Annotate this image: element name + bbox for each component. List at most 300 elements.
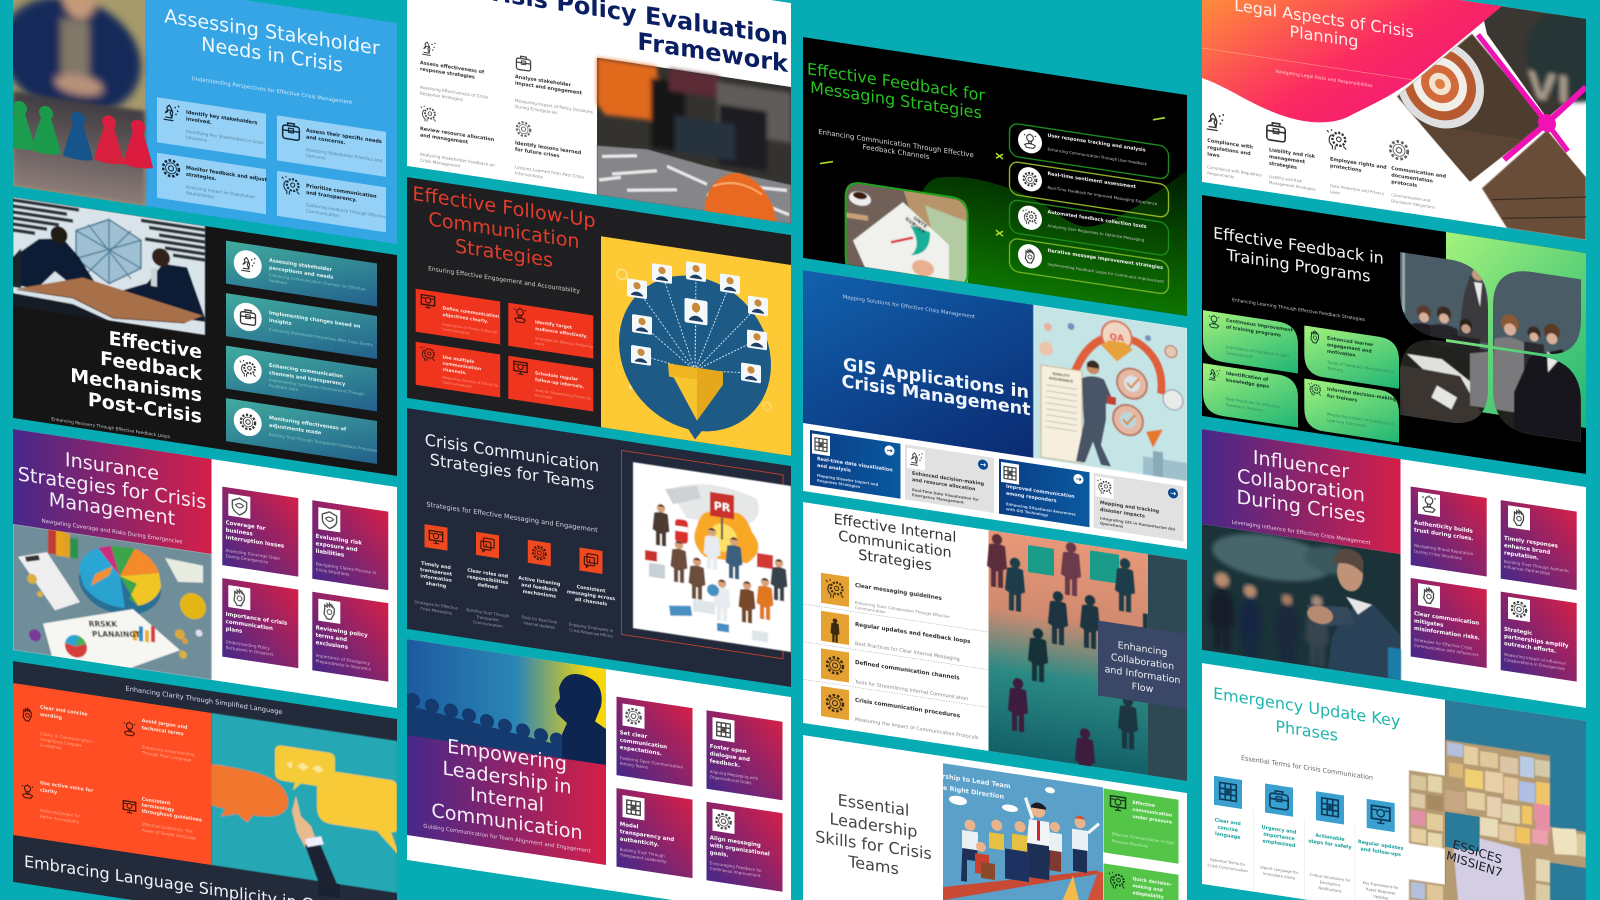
item: actionable steps: Critical Vocabulary for: [1310, 873, 1351, 883]
green backdrop: [1446, 232, 1586, 428]
item: clear roles: Communication: [473, 619, 503, 629]
subtitle: Enhancing Learning Through Effective Feedback Strategies: [1232, 297, 1365, 323]
illustration: funnel and audience: [601, 236, 791, 456]
card: prioritize communication: Prioritize communication: [306, 183, 377, 200]
panel: Influencer Collaboration During Crises: [1202, 429, 1586, 708]
card: knowledge gaps: Feedback Delivery: [1226, 402, 1263, 413]
card: business interruption: business: [226, 528, 253, 538]
card: schedule follow-up: Processes: [535, 393, 552, 400]
card: crisis communication plans: Importance of crisis: [226, 612, 288, 627]
item: clear language: concise: [1217, 825, 1239, 834]
blue block: [1445, 700, 1586, 900]
item: analyze impact: impact and engagement: [515, 80, 583, 97]
card: knowledge gaps: Best Practices for Effective: [1226, 396, 1280, 409]
panel: Assessing Stakeholder Needs in Crisis: [1, 0, 397, 244]
magenta cross: [1474, 34, 1592, 205]
item: consistent terminology: Power of Simple Language: [142, 827, 196, 841]
item: clear wording: wording: [40, 712, 63, 721]
title: Post-Crisis: [88, 388, 202, 428]
card: align messaging: with organizational: [710, 843, 770, 858]
item: regular updates: Best Practices for Clear Internal Messaging: [855, 641, 960, 663]
item: consistent terminology: [123, 794, 202, 842]
title band: [1202, 429, 1400, 554]
item: liability: Liability and risk: [1269, 147, 1316, 160]
item: timely information: [414, 523, 458, 616]
card: crisis communication plans: communication: [226, 619, 273, 632]
blue title area: Mapping Solutions for Effective Crisis Management: [843, 294, 975, 320]
card: multiple channels: communication: [442, 361, 481, 372]
item: urgency: importance: [1263, 832, 1295, 842]
item: active listening: mechanisms: [523, 589, 556, 600]
panel: Effective Feedback Mechanisms Post-Crisis: [13, 197, 397, 476]
title: Strategies: [858, 547, 932, 574]
photo: handshake over table: [13, 197, 205, 335]
illustration: quality assurance: ASSURANCE: [1049, 376, 1074, 384]
item: clear wording: Clear and concise: [40, 705, 88, 718]
item: actionable steps: Notifications: [1318, 886, 1342, 894]
item: clear messaging: Communication: [855, 605, 886, 615]
card: model transparency: authenticity.: [620, 836, 659, 848]
list item: sentiment assessment: Real-time sentiment assessment: [1048, 171, 1137, 190]
item: defined channels: Defined communication channels: [855, 660, 960, 682]
item: clear language: [1208, 775, 1249, 874]
item: identify lessons: Lessons Learned from Past Crisis: [515, 164, 584, 180]
card: multiple channels: Communications: [442, 380, 472, 389]
item: crisis procedures: Measuring the Impact of Communication Protocols: [855, 717, 979, 741]
item: assess effectiveness: [420, 40, 488, 106]
card: enhancing channels: channels and transparency: [269, 370, 346, 388]
item: clear wording: [22, 705, 93, 750]
card: implementing changes: insights: [269, 318, 291, 327]
card: schedule follow-up: follow-up intervals.: [535, 377, 584, 390]
card: monitor feedback: Relationships: [186, 190, 214, 199]
list item: automated collection: Analyzing User Responses to Optimize Messaging: [1048, 223, 1145, 243]
card: knowledge gaps: Identification of: [1226, 371, 1269, 383]
item: clear roles: [466, 530, 510, 630]
card: learner engagement: [1304, 325, 1399, 389]
item: active voice: Reducing Jargon for: [40, 808, 80, 819]
card: misinformation: Strategies for Effective Crisis: [1414, 637, 1472, 651]
card: schedule follow-up: Schedule regular: [535, 370, 579, 383]
illustration: quality assurance: [1034, 305, 1187, 481]
item: review resource: Crisis Management: [420, 157, 461, 169]
decorative sparks: [820, 66, 1165, 261]
item: avoid jargon: Avoid jargon and: [142, 718, 188, 731]
photo: blurred meeting with orange glove: [597, 58, 791, 224]
title: Effective Feedback in: [1213, 223, 1384, 268]
card: align messaging: [706, 802, 782, 892]
frame outline: [622, 450, 783, 659]
title band: Insurance: [65, 448, 159, 485]
card: strategic partnerships: Strategic: [1504, 627, 1532, 637]
card: quick decision-making: [1104, 863, 1178, 900]
card: multiple channels: [416, 342, 500, 397]
card: schedule follow-up: [508, 356, 593, 412]
photo: pointing businessman with team: [1202, 524, 1401, 680]
item: regular updates: Regular updates and feedback loops: [855, 622, 971, 645]
card: misinformation: [1411, 578, 1487, 668]
card: learner engagement: engagement and: [1327, 342, 1372, 355]
card: informed decision-making: for trainers: [1327, 393, 1357, 404]
card: open dialogue: Foster open: [710, 744, 747, 755]
card: decision-making: Emergency Management: [912, 493, 964, 505]
card: misinformation: Clear communication: [1414, 611, 1479, 627]
item: regular updates: [1358, 798, 1403, 900]
card: enhancing channels: Enhancing communication: [269, 363, 343, 380]
photo: sticky notes wall: [1409, 734, 1586, 900]
card: data visualization: and analysis: [817, 463, 851, 474]
subtitle: Enhancing Communication Through Effective: [818, 128, 974, 159]
card: learner engagement: Enhanced learner: [1327, 335, 1374, 348]
panel: GIS Applications in Crisis Management: [803, 270, 1187, 549]
item: timely information: sharing: [426, 581, 447, 590]
panel: Embracing Language Simplicity: [13, 661, 399, 900]
item: timely information: Strategies for Effective: [414, 599, 458, 611]
gradient title shape: [1202, 0, 1502, 151]
card: business interruption: Coverage for: [226, 520, 266, 532]
item: liability: management: [1269, 154, 1306, 165]
card: model transparency: Transparent Leadership: [619, 852, 667, 864]
item: regular updates: Rapid Response: [1366, 887, 1396, 896]
card: multiple channels: channels.: [442, 367, 467, 376]
panel: Essential Leadership Skills for Crisis Teams: [803, 735, 1187, 900]
card: decision-making: Real-Time Data Visualization for: [912, 488, 979, 502]
illustration: quality assurance: QUALITY: [1052, 372, 1070, 378]
item: compliance: laws: [1207, 151, 1220, 159]
card: define objectives: Importance of Timely Follow-Up: [442, 322, 498, 335]
card: enhancing channels: Implementing Continuous Improvement Through: [269, 377, 364, 397]
inner blue square: [1445, 812, 1480, 852]
item: review resource: Analyzing Stakeholder Feedback on: [420, 151, 495, 168]
item: consistent messaging: Crisis Response Efforts: [569, 627, 613, 639]
card: risk exposure: Crisis Situations: [316, 567, 349, 577]
bottom title area: [318, 881, 340, 898]
item: documentation: Disclosure Obligations: [1391, 198, 1435, 210]
title band: Empowering: [447, 735, 567, 776]
card: identify stakeholders: Situations: [186, 135, 207, 143]
card: crisis communication plans: Understanding Policy: [226, 639, 270, 651]
card: continuous improvement: of training programs: [1226, 324, 1281, 339]
card: identify audience: Identify target: [535, 319, 573, 331]
item: identify lessons: [515, 121, 584, 186]
card: identify audience: [508, 303, 594, 359]
list item: iterative improvement: Iterative message improvement strategies: [1048, 248, 1163, 271]
card: set expectations: [616, 697, 692, 787]
card: multiple channels: Measuring Success of Follow-Up: [442, 375, 499, 388]
item: regular updates: and follow-ups: [1360, 846, 1401, 858]
item: urgency: emphasized: [1263, 838, 1296, 849]
panel: Emergency Update Key Phrases: [1202, 663, 1586, 900]
item: analyze impact: Analyze stakeholder: [515, 74, 571, 89]
title: Feedback: [100, 347, 203, 385]
card: continuous improvement: [1203, 310, 1298, 373]
item: defined channels: Tools for Streamlining Internal Communication: [854, 679, 968, 702]
card: timely responses: enhance brand: [1504, 543, 1550, 556]
illustration: quality assurance: QA: [1109, 332, 1124, 344]
item: assess effectiveness: response strategies: [420, 66, 475, 81]
title band: Influencer: [1253, 446, 1349, 483]
illustration: team on a beam: [920, 760, 1104, 900]
card: prioritize communication: [277, 171, 387, 232]
item: avoid jargon: [124, 715, 195, 763]
item: assess effectiveness: Assess effectiveness of: [420, 60, 485, 76]
card: learner engagement: Types of Feedback Mechanisms in: [1326, 359, 1395, 375]
card: monitor feedback: [157, 153, 267, 214]
card: assess needs: [277, 115, 386, 177]
card: identify stakeholders: [157, 97, 266, 159]
item: documentation: Communication and: [1391, 166, 1446, 180]
item: active voice: Use active voice for: [40, 780, 94, 794]
item: clear language: Crisis Communication: [1208, 863, 1249, 874]
card: communication under pressure: [1104, 788, 1178, 864]
card: open dialogue: dialogue and: [710, 751, 750, 763]
item: active listening: and feedback: [521, 582, 558, 594]
card: identify audience: Strategies for Effective Follow-Up: [535, 336, 594, 349]
card: mapping disaster impacts: Mapping and tracking: [1100, 500, 1160, 515]
item: consistent messaging: messaging across: [567, 589, 615, 602]
card: informed decision-making: Learning Outcomes: [1327, 417, 1366, 428]
item: liability: strategies: [1269, 161, 1297, 171]
item: liability: Liability and Risk: [1269, 174, 1303, 184]
card: align messaging: Continuous Improvement: [710, 866, 761, 878]
item: defined channels: [821, 648, 968, 702]
list item: sentiment assessment: Real-Time Feedback for Improved Messaging Experience: [1048, 185, 1158, 206]
callout box: [1098, 621, 1187, 709]
card: monitor feedback: strategies.: [186, 172, 217, 182]
title: Messaging Strategies: [810, 78, 982, 122]
card: identify stakeholders: Identify key stakeholders: [186, 110, 258, 126]
card: prioritize communication: Gathering Feedback Through Effective: [306, 202, 387, 219]
item: liability: Management Strategies: [1269, 180, 1316, 192]
card: timely responses: [1501, 500, 1577, 590]
item: clear roles: Transparent: [475, 614, 499, 623]
card: data visualization: Response Strategies: [817, 479, 861, 489]
card: improved communication: [999, 459, 1090, 527]
card: assessing perceptions: Assessing stakeholder: [269, 258, 333, 273]
item: consistent messaging: all channels: [575, 597, 607, 608]
card: assess needs: Assess their specific needs: [306, 128, 382, 145]
card: risk exposure: [312, 500, 388, 590]
title: Effective Internal: [834, 512, 956, 546]
card: assess needs: Concerns: [306, 153, 326, 161]
blue title area: [803, 270, 1034, 458]
item: employee rights: Laws: [1330, 189, 1340, 195]
card: misinformation: misinformation risks.: [1414, 626, 1480, 642]
card: continuous improvement: Development: [1226, 350, 1253, 359]
illustration: team on a beam: Leadership to Lead Team: [920, 769, 1011, 790]
panel: Effective Feedback in Training Programs: [1202, 195, 1586, 474]
panel: Effective Internal Communication Strategies: [803, 502, 1187, 797]
item: consistent terminology: terminology: [142, 802, 175, 813]
card: risk exposure: Evaluating risk: [316, 534, 362, 547]
card: timely responses: Timely responses: [1504, 536, 1559, 550]
card: prioritize communication: Communication: [306, 208, 339, 218]
card: knowledge gaps: [1203, 363, 1298, 427]
card: align messaging: goals.: [710, 850, 728, 859]
subtitle: Enhancing Recovery Through Effective Feedback Loops: [51, 416, 171, 440]
subtitle: Ensuring Effective Engagement and Accountability: [428, 265, 580, 295]
card: identify audience: Plans: [535, 341, 544, 347]
photo: pie chart and risk planning: RRSKK: [88, 619, 118, 629]
card: open dialogue: Organizational Goals: [710, 774, 751, 785]
card: assessing perceptions: Feedback: [269, 278, 288, 286]
photo: leader silhouette and crowd: [406, 639, 606, 766]
card: align messaging: Encouraging Feedback for: [710, 860, 762, 873]
card: crisis communication plans: plans: [226, 626, 243, 635]
list item: sentiment assessment: [1010, 161, 1168, 218]
item: clear language: Essential Terms for: [1210, 858, 1246, 867]
card: identify audience: audience effectively.: [535, 326, 588, 340]
card: assessing perceptions: perceptions and needs: [269, 265, 333, 281]
card: risk exposure: Navigating Claims Process in: [316, 561, 376, 575]
title: Effective Follow-Up: [412, 182, 596, 232]
card: strategic partnerships: outreach efforts.: [1504, 641, 1556, 655]
card: implementing changes: [226, 293, 377, 359]
card: assessing perceptions: Enhancing Communication Channels for Effective: [269, 272, 366, 292]
card: model transparency: Model: [620, 822, 639, 830]
list item: response tracking: User response tracking and analysis: [1048, 133, 1146, 154]
item: documentation: documentation: [1391, 172, 1433, 185]
item: clear roles: defined: [478, 582, 498, 591]
card: communication under pressure: Effective: [1132, 800, 1155, 809]
card: implementing changes: Evaluating Stakeholder Responses After Crisis Events: [269, 327, 373, 347]
title: Mechanisms: [70, 364, 202, 407]
card: model transparency: transparency and: [620, 829, 674, 843]
title: Leadership: [830, 809, 917, 841]
card: data visualization: Mapping Disaster Impact and: [817, 474, 879, 487]
photo: target and hourglass in diamonds: [1392, 0, 1600, 245]
card: monitoring effectiveness: [226, 398, 377, 464]
card: enhancing channels: Feedback Data: [269, 383, 299, 392]
title: Framework: [637, 27, 789, 78]
panel: Crisis Policy Evaluation Framework: [407, 0, 791, 224]
card: policy terms: Preparedness in Insurance: [316, 658, 371, 672]
card: set expectations: communication: [620, 738, 667, 751]
card: mapping disaster impacts: disaster impacts: [1100, 507, 1145, 520]
card: set expectations: Among Teams: [620, 761, 648, 770]
card: monitor feedback: Analyzing Impact on Stakeholder: [186, 184, 256, 200]
subtitle: Strategies for Effective Messaging and Engagement: [426, 500, 598, 534]
item: clear wording: Simplifying Complex: [40, 737, 82, 748]
item: identify lessons: Identify lessons learned: [515, 140, 582, 156]
item: consistent messaging: [567, 546, 615, 639]
title band: Strategies for Crisis: [18, 462, 206, 514]
item: documentation: protocols: [1391, 179, 1417, 189]
item: clear wording: Clarity in Communication:: [40, 731, 93, 744]
item: consistent terminology: Effective Guidelines: The: [142, 821, 193, 834]
item: analyze impact: During Emergencies: [515, 104, 558, 115]
card: crisis communication plans: Exclusions in Disasters: [226, 645, 274, 657]
photo: speech bubbles and pointing hand: [211, 713, 399, 893]
title: Needs in Crisis: [201, 33, 343, 77]
title: Skills for Crisis: [815, 827, 932, 863]
card: decision-making: and resource allocation: [912, 477, 976, 493]
card: improved communication: Improved communication: [1006, 484, 1075, 500]
card: continuous improvement: Continuous improvement: [1226, 318, 1294, 334]
photo: survey on clipboard: UNTE: [912, 216, 928, 230]
panel: Effective Feedback for Messaging Strategies: [803, 37, 1187, 323]
card: data visualization: Real-time data visualization: [817, 456, 893, 474]
item: avoid jargon: Enhancing Understanding: [142, 744, 195, 757]
item: liability: [1267, 122, 1316, 192]
title: Communication: [428, 207, 580, 253]
card: authenticity: Authenticity builds: [1414, 520, 1474, 535]
illustration: PR crisis team: PR: [714, 499, 731, 515]
photo: pie chart and risk planning: PLANAINGT: [91, 630, 142, 639]
photo: survey on clipboard: SURVEY: [904, 216, 926, 236]
item: timely information: transparent: [420, 567, 453, 578]
item: urgency: Urgency and: [1262, 825, 1297, 836]
card: decision-making: [905, 444, 994, 513]
item: clear messaging: [821, 573, 950, 624]
item: avoid jargon: technical terms: [142, 725, 184, 737]
list item: iterative improvement: [1010, 238, 1168, 295]
item: compliance: [1207, 112, 1263, 184]
card: assessing perceptions: [226, 241, 377, 306]
card: strategic partnerships: Measuring Impact of Influencer: [1504, 652, 1567, 666]
item: clear messaging: Enhancing Team Collaboration Through Effective: [855, 600, 950, 619]
title band: During Crises: [1236, 485, 1366, 528]
card: set expectations: Set clear: [620, 730, 648, 740]
card: define objectives: objectives clearly.: [442, 312, 488, 325]
card: set expectations: expectations.: [620, 745, 662, 757]
card: prioritize communication: and transparency.: [306, 190, 357, 204]
card: business interruption: interruption losses: [226, 535, 285, 550]
item: actionable steps: Emergency: [1320, 880, 1341, 888]
item: active listening: [518, 538, 561, 631]
card: business interruption: [222, 487, 298, 577]
item: crisis procedures: Crisis communication procedures: [855, 698, 961, 720]
card: policy terms: terms and: [316, 633, 347, 643]
card: identify stakeholders: involved.: [186, 116, 212, 126]
item: active voice: [22, 780, 94, 824]
card: communication under pressure: communication: [1132, 807, 1172, 819]
item: clear roles: responsibilities: [467, 574, 509, 586]
item: active listening: Tools for Real-Time: [521, 614, 558, 625]
card: policy terms: [312, 592, 388, 682]
item: employee rights: Employee rights and: [1330, 156, 1387, 171]
card: policy terms: exclusions: [316, 640, 349, 651]
panel: Legal Aspects of Crisis Planning: [1202, 0, 1600, 245]
title band: Leveraging Influence for Effective Crisis Management: [1231, 519, 1371, 546]
item: review resource: [420, 106, 494, 168]
item: employee rights: Data Protection and Privacy: [1330, 183, 1385, 196]
item: urgency: [1260, 783, 1299, 881]
green wave glow: [908, 128, 1187, 316]
item: actionable steps: [1308, 790, 1352, 895]
card: strategic partnerships: [1501, 592, 1577, 682]
photo: pie chart and risk planning: [13, 521, 212, 684]
card: identify stakeholders: Identifying Key Stakeholders in Crisis: [186, 129, 264, 145]
item: timely information: information: [420, 573, 452, 584]
card: open dialogue: feedback.: [710, 759, 740, 769]
item: analyze impact: [515, 55, 593, 121]
title: Phrases: [1275, 717, 1338, 745]
card: data visualization: [810, 430, 900, 499]
note text: MISSIEN7: [1445, 848, 1504, 880]
card: define objectives: Communication: [442, 327, 470, 335]
callout box: Enhancing: [1118, 640, 1167, 659]
item: urgency: Immediate Alerts: [1263, 872, 1295, 881]
title band: [407, 729, 606, 865]
title band: Leadership in: [442, 756, 572, 799]
item: analyze impact: Measuring Impact of Policy Decisions: [515, 98, 593, 115]
card: strategic partnerships: Collaborations in Emergencies: [1504, 657, 1565, 671]
blue title area: Crisis Management: [842, 372, 1030, 420]
list item: response tracking: Enhancing Communication Through User Feedback: [1048, 146, 1148, 167]
title: Strategies: [455, 234, 553, 272]
card: authenticity: During Crisis Situations: [1414, 549, 1462, 561]
